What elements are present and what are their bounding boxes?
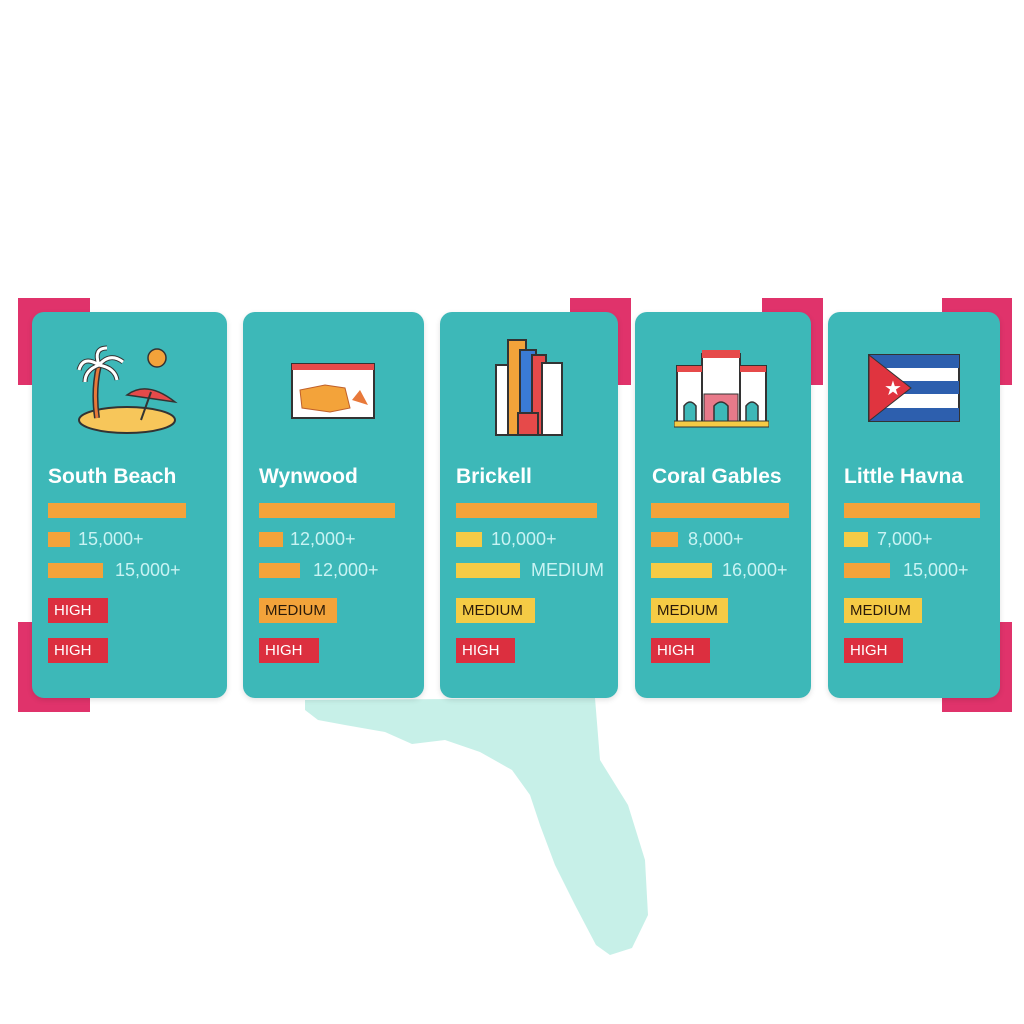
panel: Brickell <box>440 312 618 698</box>
title: Little Havna: Little Havna <box>844 465 963 488</box>
text: 8,000+ <box>688 529 744 549</box>
text: 15,000+ <box>115 560 181 580</box>
panel: Little Havna <box>828 312 1000 698</box>
panel: Wynwood <box>243 312 424 698</box>
text: HIGH <box>54 642 92 659</box>
text: 12,000+ <box>290 529 356 549</box>
title: South Beach: South Beach <box>48 465 176 488</box>
text: HIGH <box>54 602 92 619</box>
icon: cuban flag: ★ <box>884 378 902 400</box>
text: 15,000+ <box>78 529 144 549</box>
decorative pink corners <box>18 298 90 385</box>
panel: South Beach <box>32 312 227 698</box>
icon: graffiti wall <box>291 363 375 419</box>
icon: building <box>674 350 769 428</box>
text: HIGH <box>657 642 694 659</box>
icon: beach <box>76 346 178 434</box>
text: HIGH <box>850 642 888 659</box>
text: 15,000+ <box>903 560 969 580</box>
text: 16,000+ <box>722 560 788 580</box>
text: 12,000+ <box>313 560 379 580</box>
icon: skyscrapers <box>495 339 563 436</box>
text: MEDIUM <box>657 602 718 619</box>
text: 7,000+ <box>877 529 933 549</box>
text: HIGH <box>462 642 500 659</box>
text: 10,000+ <box>491 529 557 549</box>
icon: cuban flag <box>868 354 960 422</box>
text: MEDIUM <box>462 602 523 619</box>
text: MEDIUM <box>265 602 326 619</box>
panel: Coral Gables <box>635 312 811 698</box>
text: HIGH <box>265 642 302 659</box>
text: MEDIUM <box>531 560 604 580</box>
title: Coral Gables: Coral Gables <box>652 465 782 488</box>
title: Wynwood: Wynwood <box>259 465 358 488</box>
title: Brickell: Brickell <box>456 465 532 488</box>
text: MEDIUM <box>850 602 911 619</box>
